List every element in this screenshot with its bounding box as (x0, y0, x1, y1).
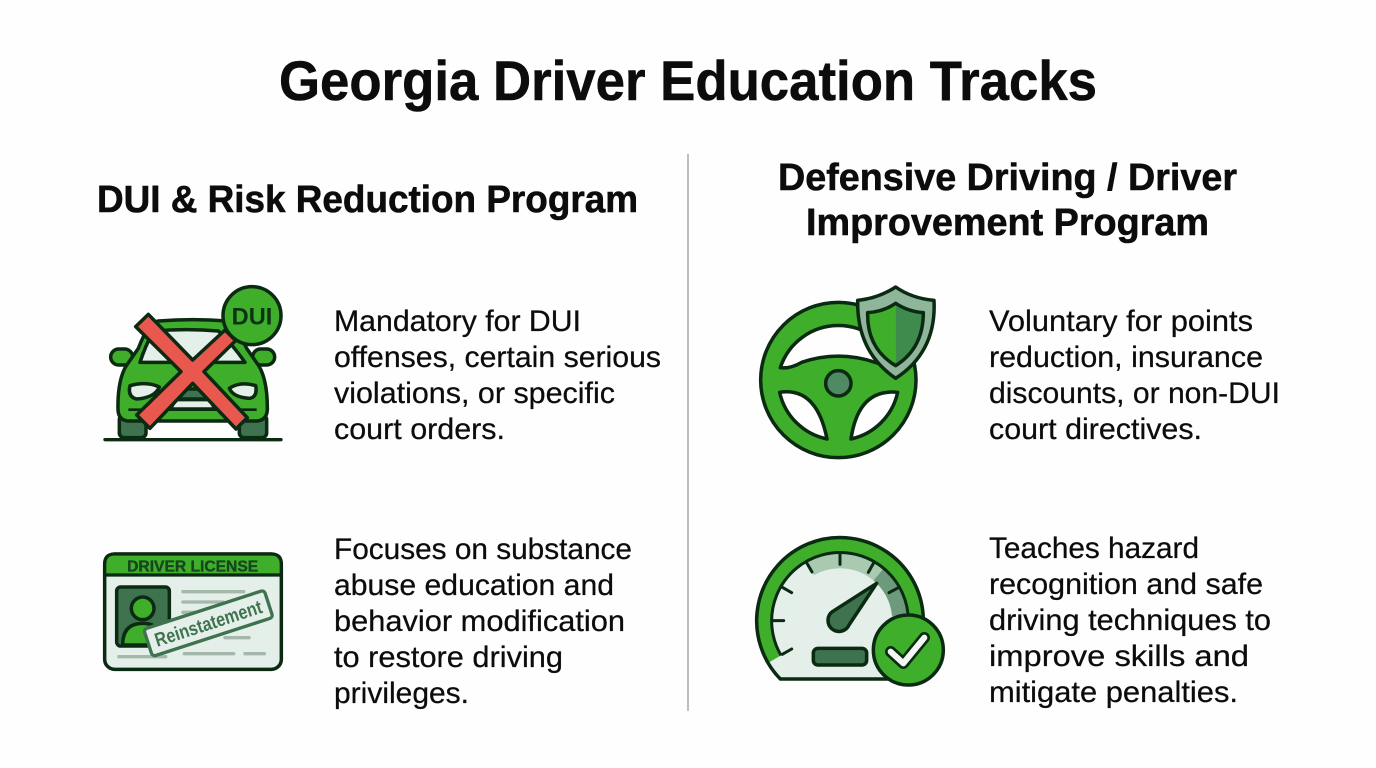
text: voluntary for points reduction (989, 305, 1280, 446)
icon: driver license with reinstatement stamp (105, 554, 281, 669)
panel: defensive driving and driver improvement program (757, 157, 1280, 709)
text: voluntary for points reduction: reduction, insurance (989, 341, 1263, 374)
icon: speedometer with check mark (757, 537, 943, 685)
text: teaches hazard recognition: mitigate penalties. (989, 676, 1238, 709)
heading: defensive driving program: Defensive Driving / Driver (778, 157, 1237, 199)
text: teaches hazard recognition: Teaches hazard (989, 532, 1199, 565)
text: voluntary for points reduction: court directives. (989, 413, 1202, 446)
text: teaches hazard recognition: driving techniques to (989, 604, 1271, 637)
text: focuses on substance abuse (334, 533, 632, 710)
text: mandatory for DUI: Mandatory for DUI (334, 305, 581, 338)
text: voluntary for points reduction: discounts, or non-DUI (989, 377, 1280, 410)
icon: driver license with reinstatement stamp: Reinstatement (152, 597, 265, 652)
icon: car with red X and DUI badge: DUI (232, 304, 272, 331)
text: voluntary for points reduction: Voluntary for points (989, 305, 1253, 338)
heading: defensive driving program: Improvement Program (806, 202, 1209, 244)
text: mandatory for DUI (334, 305, 661, 446)
text: mandatory for DUI: violations, or specific (334, 377, 615, 410)
text: focuses on substance abuse: to restore driving (334, 641, 563, 674)
heading: defensive driving program (778, 157, 1237, 244)
icon: driver license with reinstatement stamp: DRIVER LICENSE (127, 559, 258, 576)
title: Georgia Driver Education Tracks (279, 50, 1097, 112)
panel: DUI and risk reduction program (97, 179, 661, 710)
text: mandatory for DUI: court orders. (334, 413, 505, 446)
text: teaches hazard recognition (989, 532, 1271, 709)
text: mandatory for DUI: offenses, certain serious (334, 341, 661, 374)
text: focuses on substance abuse: behavior modification (334, 605, 625, 638)
heading: DUI program: DUI & Risk Reduction Program (97, 179, 638, 221)
text: teaches hazard recognition: improve skills and (989, 640, 1249, 673)
icon: car with red X and DUI badge (105, 287, 281, 440)
text: focuses on substance abuse: Focuses on substance (334, 533, 632, 566)
text: focuses on substance abuse: abuse education and (334, 569, 614, 602)
text: teaches hazard recognition: recognition and safe (989, 568, 1263, 601)
icon: steering wheel with shield (761, 287, 934, 458)
text: focuses on substance abuse: privileges. (334, 677, 469, 710)
